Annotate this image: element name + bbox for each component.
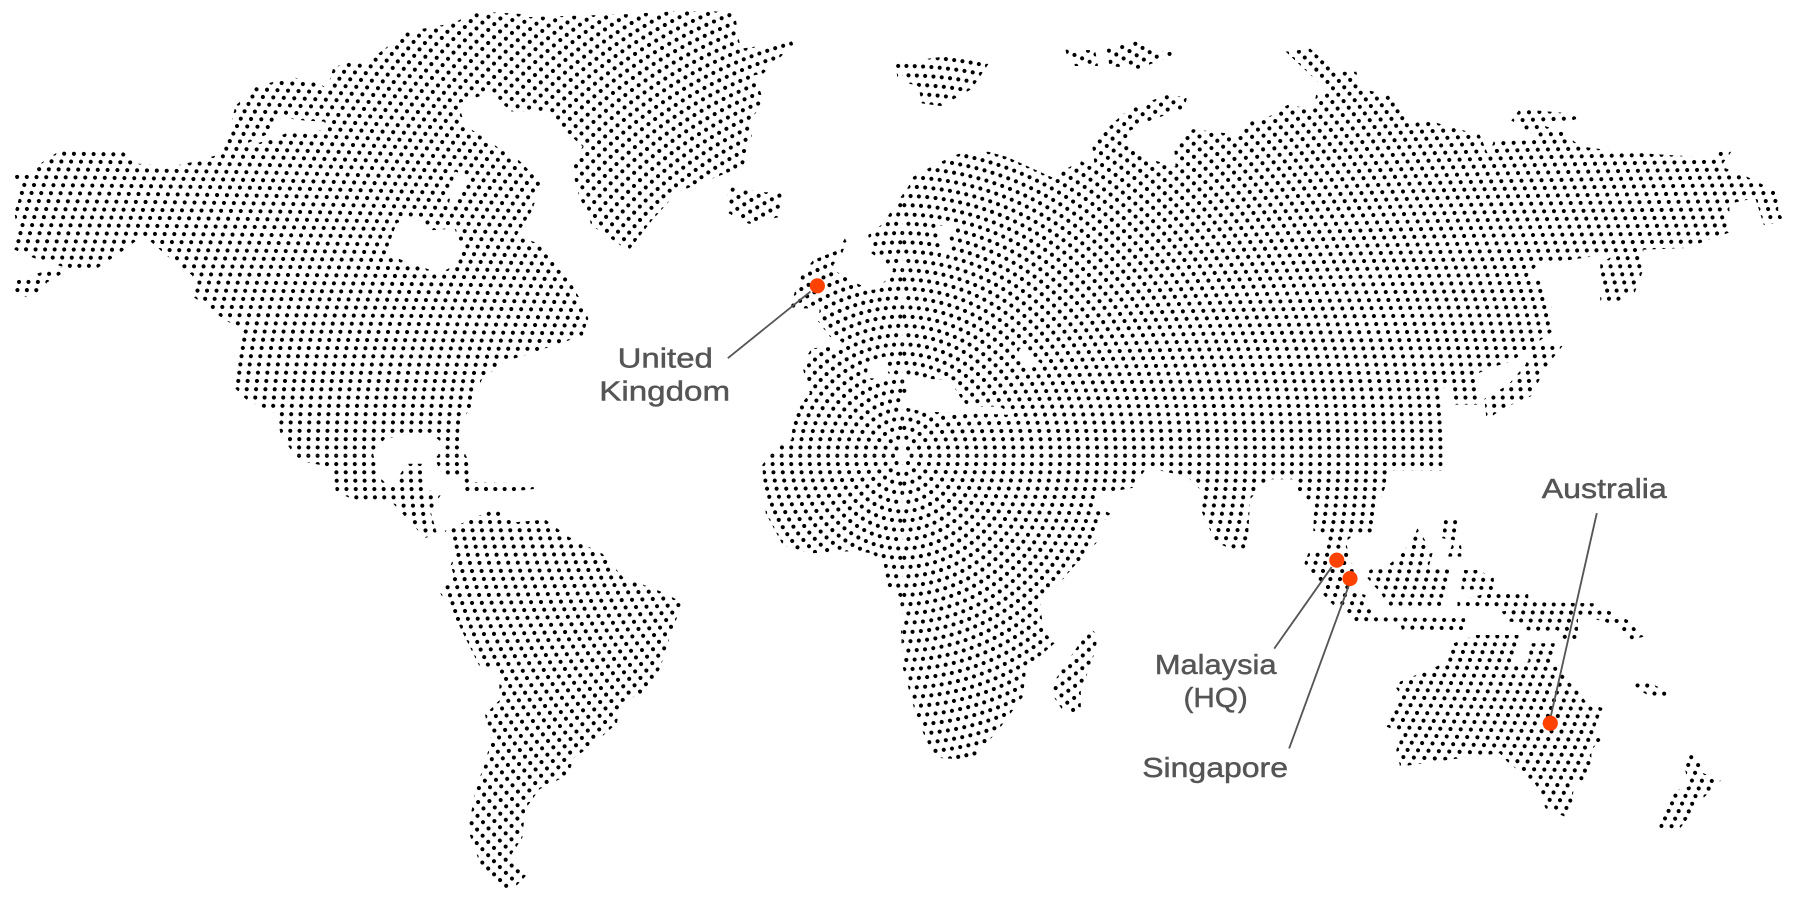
dotted landmass: Eurasia and Africa [728,42,1782,828]
dotted landmass: Indonesia, Australia and New Zealand [740,293,1721,828]
callout: Singapore [1142,571,1358,783]
dotted landmass: Arctic islands [896,42,1172,106]
callout: Singapore: Singapore [1142,752,1288,783]
dotted landmass: South America [440,293,1592,888]
dotted landmass: Madagascar [740,293,1592,740]
callout: United Kingdom: Kingdom [599,376,730,407]
callout: Malaysia (HQ): (HQ) [1184,682,1248,713]
callout: United Kingdom [599,278,825,407]
callout: Australia [1542,473,1668,731]
callout: Australia: Australia [1542,473,1668,504]
callout: Malaysia (HQ) [1155,553,1344,713]
callout: Malaysia (HQ): Malaysia [1155,649,1277,680]
callout: United Kingdom: United [618,342,713,373]
dotted landmass: Iceland [727,188,786,224]
